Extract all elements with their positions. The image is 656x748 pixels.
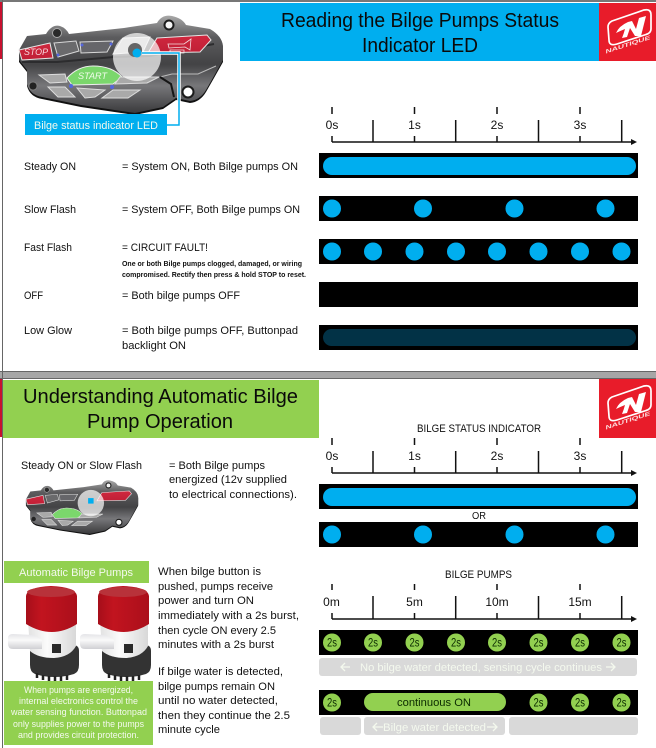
bar: continuous ON: 2s xyxy=(534,696,544,710)
text block: LED state descriptions: backlight ON xyxy=(122,340,186,352)
title banner: automatic operation: Pump Operation xyxy=(87,411,233,433)
text block: LED state descriptions: Fast Flash xyxy=(24,242,72,254)
bar: slow flash xyxy=(319,196,638,221)
chart: seconds timeline axis 2: 0s xyxy=(326,449,338,463)
bar: fast flash xyxy=(319,239,638,264)
bar: continuous ON xyxy=(319,690,638,715)
logo: Nautique bottom: NAUTIQUE xyxy=(605,411,652,431)
text block: steady on or slow flash: Steady ON or Slow Flash xyxy=(21,460,142,472)
text block: LED state descriptions: Slow Flash xyxy=(24,204,76,216)
text block: LED state descriptions: = System OFF, Both Bilge pumps ON xyxy=(122,204,300,216)
callout: pump electronics note xyxy=(4,681,153,745)
label: automatic bilge pumps: Automatic Bilge Pumps xyxy=(19,567,133,579)
bar: pump 2s bursts: 2s xyxy=(492,636,502,650)
chart: seconds timeline axis 2 xyxy=(326,438,637,476)
label: no bilge water detected: No bilge water detected, sensing cycle continues xyxy=(360,662,603,674)
callout: pump electronics note: When pumps are energized, xyxy=(24,685,133,696)
text block: LED state descriptions xyxy=(24,161,306,352)
text block: pump behaviour: pushed, pumps receive xyxy=(158,581,273,593)
bar: slow flash 2 xyxy=(319,522,638,547)
callout: pump electronics note: water sensing function. Buttonpad xyxy=(10,707,147,718)
chart: seconds timeline axis 2: 2s xyxy=(491,449,503,463)
bar: continuous ON: 2s xyxy=(327,696,337,710)
bar: pump 2s bursts: 2s xyxy=(534,636,544,650)
text block: pump behaviour: minute cycle xyxy=(158,724,220,736)
text block: LED state descriptions: One or both Bilge pumps clogged, damaged, or wiring xyxy=(122,261,302,268)
text block: LED state descriptions: = System ON, Both Bilge pumps ON xyxy=(122,161,298,173)
text block: LED state descriptions: = Both bilge pumps OFF, Buttonpad xyxy=(122,325,298,337)
text block: pump behaviour xyxy=(158,566,299,736)
chart: seconds timeline axis xyxy=(326,107,637,145)
label: bilge water detected xyxy=(320,717,638,735)
chart: seconds timeline axis 2: 3s xyxy=(574,449,586,463)
bar: pump 2s bursts: 2s xyxy=(575,636,585,650)
text block: pump behaviour: then they continue the 2.5 xyxy=(158,710,290,722)
icon: buttonpad with LED callout: START xyxy=(78,71,109,81)
heading: bilge pumps: BILGE PUMPS xyxy=(445,569,512,581)
heading: bilge status indicator: BILGE STATUS INDICATOR xyxy=(417,423,541,435)
text block: LED state descriptions: Steady ON xyxy=(24,161,76,173)
panel: LED status section xyxy=(19,3,656,352)
icon: buttonpad with LED callout: STOP xyxy=(24,47,48,57)
label: bilge water detected: Bilge water detected xyxy=(383,722,486,734)
text block: steady on or slow flash: energized (12v supplied xyxy=(169,474,287,486)
text block: LED state descriptions: = Both bilge pumps OFF xyxy=(122,290,240,302)
text block: pump behaviour: minutes with a 2s burst xyxy=(158,639,274,651)
label: OR: OR xyxy=(472,510,486,522)
bar: pump 2s bursts: 2s xyxy=(327,636,337,650)
logo: Nautique top: NAUTIQUE xyxy=(605,35,652,55)
chart: seconds timeline axis: 3s xyxy=(574,118,586,132)
bar: pump 2s bursts: 2s xyxy=(616,636,626,650)
icon: buttonpad with LED callout xyxy=(19,16,223,135)
callout: pump electronics note: only supplies power to the pumps xyxy=(13,719,144,730)
label: no bilge water detected xyxy=(319,658,637,676)
text block: LED state descriptions: compromised. Rectify then press & hold STOP to reset. xyxy=(122,272,306,279)
chart: seconds timeline axis: 0s xyxy=(326,118,338,132)
chart: minutes timeline axis: 0m xyxy=(323,595,340,609)
text block: LED state descriptions: OFF xyxy=(24,290,43,302)
bar: pump 2s bursts: 2s xyxy=(368,636,378,650)
bar: off xyxy=(319,282,638,307)
title banner: reading the LED: Indicator LED xyxy=(362,35,478,57)
text block: steady on or slow flash xyxy=(21,460,297,501)
panel: automatic bilge pump section xyxy=(3,379,656,745)
bar: steady ON xyxy=(319,153,638,178)
bar: steady ON 2 xyxy=(319,484,638,509)
icon: bilge pump left xyxy=(8,586,79,681)
icon: small buttonpad xyxy=(26,480,138,535)
chart: minutes timeline axis xyxy=(323,584,637,622)
bar: continuous ON: continuous ON xyxy=(397,697,471,709)
icon: buttonpad with LED callout: Bilge status indicator LED xyxy=(34,120,158,132)
text block: pump behaviour: immediately with a 2s burst, xyxy=(158,610,299,622)
icon: bilge pump right xyxy=(80,586,151,681)
text block: pump behaviour: power and turn ON xyxy=(158,595,254,607)
bar: pump 2s bursts: 2s xyxy=(451,636,461,650)
text block: LED state descriptions: = CIRCUIT FAULT! xyxy=(122,242,208,254)
callout: pump electronics note: internal electronics control the xyxy=(19,696,138,707)
logo: Nautique top xyxy=(599,3,656,61)
chart: minutes timeline axis: 5m xyxy=(406,595,423,609)
chart: seconds timeline axis 2: 1s xyxy=(408,449,421,463)
callout: pump electronics note: and provides circuit protection. xyxy=(18,730,139,741)
label: automatic bilge pumps xyxy=(4,561,149,583)
text block: pump behaviour: then cycle ON every 2.5 xyxy=(158,625,276,637)
title banner: automatic operation xyxy=(3,380,319,438)
text block: LED state descriptions: Low Glow xyxy=(24,325,72,337)
chart: seconds timeline axis: 2s xyxy=(491,118,503,132)
bar: pump 2s bursts: 2s xyxy=(410,636,420,650)
chart: minutes timeline axis: 10m xyxy=(485,595,509,609)
bar: continuous ON: 2s xyxy=(616,696,626,710)
text block: pump behaviour: When bilge button is xyxy=(158,566,262,578)
bar: continuous ON: 2s xyxy=(575,696,585,710)
bar: pump 2s bursts xyxy=(319,630,638,655)
chart: seconds timeline axis: 1s xyxy=(408,118,421,132)
text block: pump behaviour: If bilge water is detected, xyxy=(158,666,283,678)
text block: steady on or slow flash: to electrical connections). xyxy=(169,489,297,501)
title banner: reading the LED xyxy=(240,3,599,61)
text block: steady on or slow flash: = Both Bilge pumps xyxy=(169,460,265,472)
chart: minutes timeline axis: 15m xyxy=(568,595,592,609)
text block: pump behaviour: bilge pumps remain ON xyxy=(158,681,275,693)
logo: Nautique bottom xyxy=(599,379,656,438)
text block: pump behaviour: until no water detected, xyxy=(158,695,278,707)
bar: low glow xyxy=(319,325,638,350)
title banner: reading the LED: Reading the Bilge Pumps Status xyxy=(281,10,559,32)
title banner: automatic operation: Understanding Automatic Bilge xyxy=(23,386,298,408)
